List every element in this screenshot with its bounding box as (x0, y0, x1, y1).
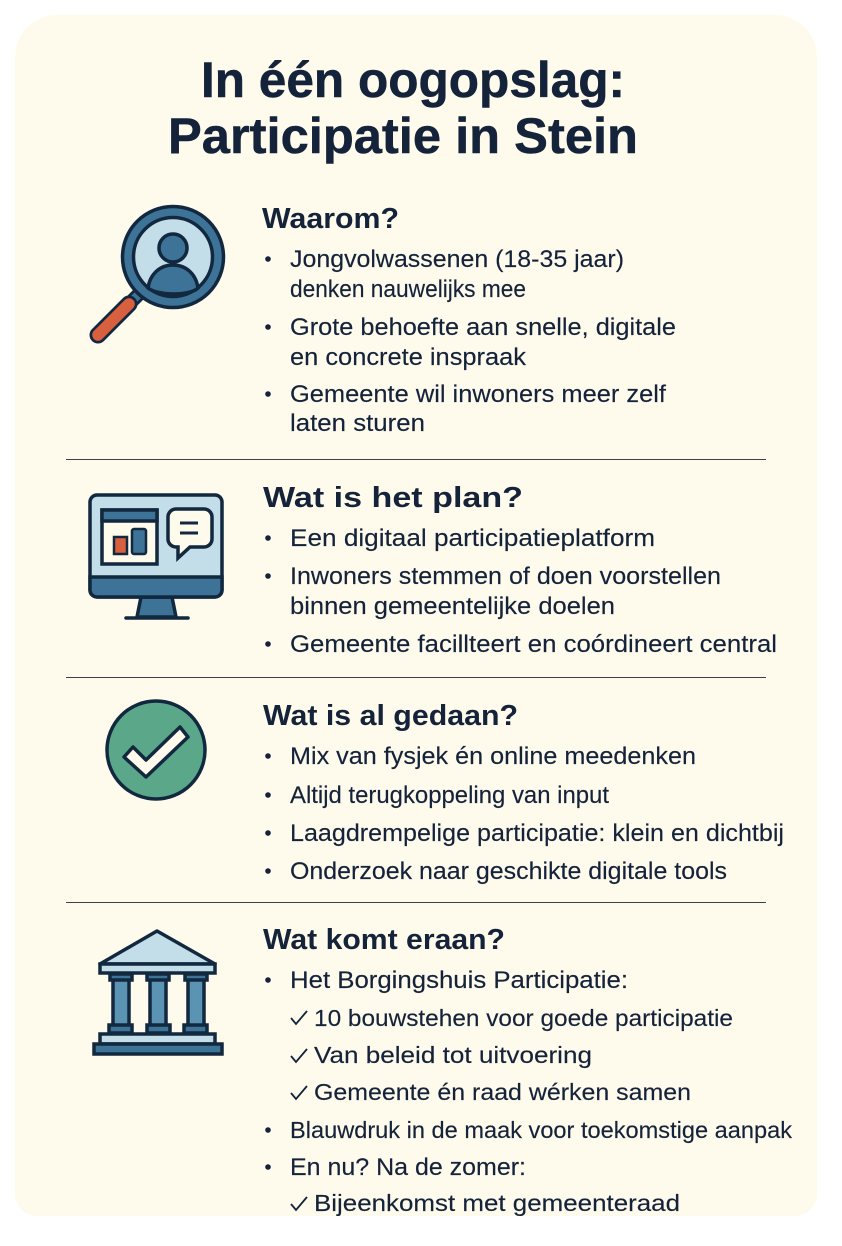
icon: green check mark (107, 701, 205, 799)
icon: magnifying glass with person (98, 206, 224, 335)
section: Waarom? (262, 203, 676, 437)
section: Wat is het plan?: Inwoners stemmen of doen voorstellen (290, 563, 721, 590)
section: Wat is het plan?: Een digitaal participatieplatform (290, 525, 655, 552)
section: Wat komt eraan?: En nu? Na de zomer: (290, 1154, 526, 1181)
title (168, 52, 638, 164)
section: Waarom?: laten sturen (290, 410, 425, 437)
section: Wat is al gedaan? (263, 700, 784, 885)
title: Participatie in Stein (168, 108, 638, 164)
section: Wat is het plan?: binnen gemeentelijke doelen (290, 593, 615, 620)
icon: classical building (94, 931, 222, 1054)
section: Waarom?: en concrete inspraak (290, 344, 527, 371)
section: Wat is het plan?: Wat is het plan? (263, 482, 523, 514)
section: Wat is het plan?: Gemeente facillteert en coórdineert central (290, 631, 777, 658)
section: Wat komt eraan?: Bijeenkomst met gemeenteraad (314, 1190, 680, 1216)
section: Waarom?: denken nauwelijks mee (290, 276, 526, 303)
section: Wat is al gedaan?: Altijd terugkoppeling van input (290, 782, 609, 809)
section: Wat is al gedaan?: Onderzoek naar geschikte digitale tools (290, 858, 727, 885)
section: Wat komt eraan?: Gemeente én raad wérken samen (314, 1079, 691, 1105)
section: Wat komt eraan? (263, 924, 792, 1216)
title: In één oogopslag: (201, 52, 625, 108)
section: Wat komt eraan?: Van beleid tot uitvoering (314, 1042, 592, 1068)
section: Wat komt eraan?: Blauwdruk in de maak voor toekomstige aanpak (290, 1117, 792, 1143)
section: Wat komt eraan?: 10 bouwstehen voor goede participatie (314, 1005, 733, 1031)
section: Wat komt eraan?: Wat komt eraan? (263, 924, 505, 956)
section: Waarom?: Waarom? (262, 203, 399, 235)
icon: monitor with chart and speech bubble (90, 495, 222, 618)
section: Waarom?: Gemeente wil inwoners meer zelf (290, 381, 666, 408)
section: Wat komt eraan?: Het Borgingshuis Participatie: (290, 967, 628, 994)
section: Wat is al gedaan?: Mix van fysjek én online meedenken (290, 743, 696, 770)
section: Wat is al gedaan?: Wat is al gedaan? (263, 700, 518, 732)
section: Waarom?: Jongvolwassenen (18-35 jaar) (290, 246, 624, 273)
section: Wat is het plan? (263, 482, 777, 658)
section: Wat is al gedaan?: Laagdrempelige participatie: klein en dichtbij (290, 820, 784, 847)
section: Waarom?: Grote behoefte aan snelle, digitale (290, 314, 676, 341)
